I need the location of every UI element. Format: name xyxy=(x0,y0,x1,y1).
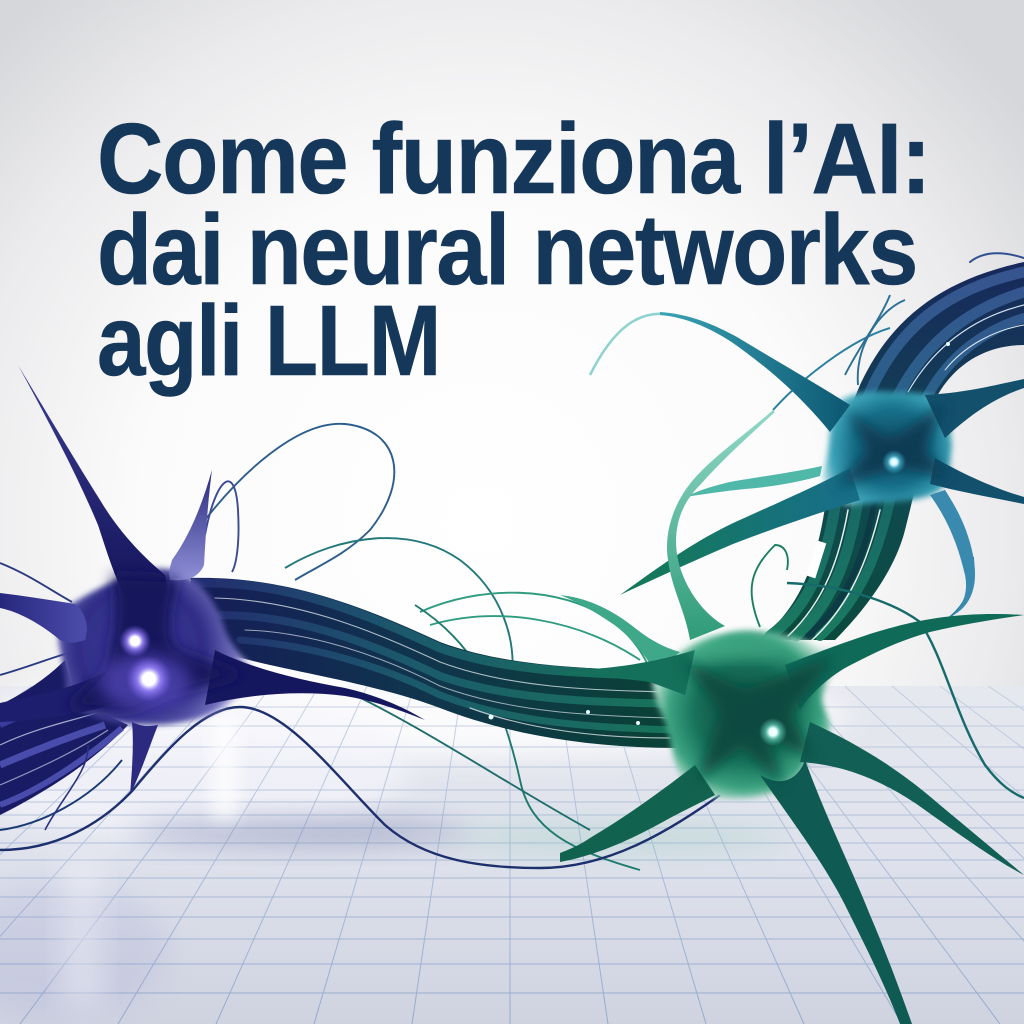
main axon bundle xyxy=(190,578,680,748)
dendrites xyxy=(18,365,166,625)
glow point xyxy=(759,718,787,746)
dendrites xyxy=(660,312,850,432)
soma xyxy=(822,391,952,505)
neuron: green xyxy=(560,410,1024,1024)
neuron: purple xyxy=(0,365,425,795)
dendrites xyxy=(667,410,775,640)
glow point upper xyxy=(119,625,151,657)
neuron: teal xyxy=(620,312,1024,617)
dark star core xyxy=(680,655,835,790)
glow point lower xyxy=(126,656,172,702)
dark star core xyxy=(65,575,245,712)
soma xyxy=(58,569,255,725)
dark star core xyxy=(835,402,950,488)
thin wandering fibres xyxy=(0,295,1024,870)
glow point xyxy=(882,450,906,474)
soma xyxy=(653,630,833,798)
floor with perspective grid xyxy=(0,673,1024,1024)
title: Come funziona l’AI: xyxy=(97,103,930,215)
title xyxy=(97,103,930,397)
floor reflections and shadow xyxy=(0,715,790,1020)
bundle sparkles xyxy=(488,342,950,725)
title: dai neural networks xyxy=(97,194,917,306)
right vertical axon bundle xyxy=(758,253,1024,640)
title: agli LLM xyxy=(97,285,440,397)
left lower axon bundle xyxy=(0,660,128,830)
